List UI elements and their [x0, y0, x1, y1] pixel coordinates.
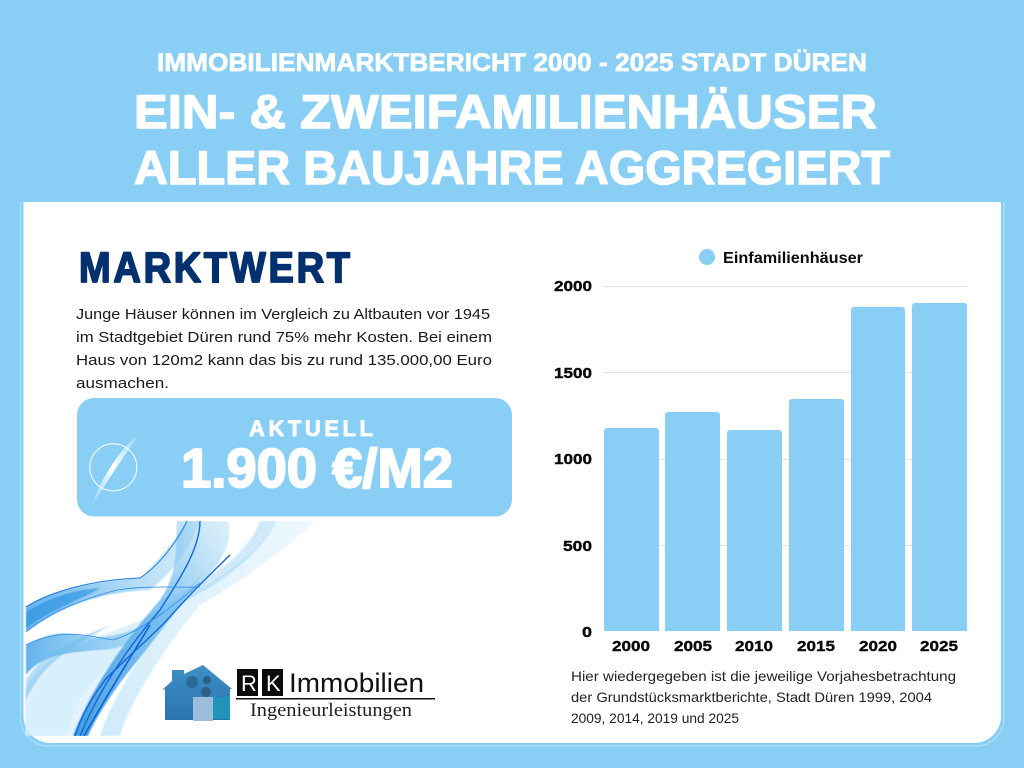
y axis labels	[554, 278, 592, 641]
logo mark: RK	[237, 669, 283, 696]
logo mark: RK: R	[241, 671, 257, 696]
y axis labels: 0	[582, 624, 592, 641]
body text: im Stadtgebiet Düren rund 75% mehr Kosten. Bei einem	[76, 329, 492, 346]
callout label: AKTUELL	[249, 416, 373, 441]
callout value: 1.900 €/M2	[181, 437, 453, 499]
title line: report name: IMMOBILIENMARKTBERICHT 2000 - 2025 STADT DÜREN	[157, 48, 867, 77]
logo	[162, 665, 435, 721]
icon: circle with slash	[90, 434, 139, 505]
y axis labels: 1000	[554, 451, 592, 468]
x axis labels: 2020	[859, 638, 897, 655]
chart source note: der Grundstücksmarktberichte, Stadt Düren 1999, 2004	[571, 689, 932, 705]
logo name: Immobilien	[289, 668, 424, 698]
bars	[604, 303, 967, 631]
x axis labels: 2000	[612, 638, 650, 655]
body text: ausmachen.	[76, 375, 169, 392]
x axis labels: 2005	[674, 638, 712, 655]
logo subtitle: Ingenieurleistungen	[250, 701, 412, 721]
chart legend: Einfamilienhäuser	[723, 250, 863, 267]
chart source note: 2009, 2014, 2019 und 2025	[571, 710, 739, 726]
x axis labels: 2015	[797, 638, 835, 655]
y axis labels: 500	[563, 538, 592, 555]
y axis labels: 2000	[554, 278, 592, 295]
body text: Haus von 120m2 kann das bis zu rund 135.000,00 Euro	[76, 352, 492, 369]
x axis labels: 2025	[920, 638, 958, 655]
callout: current price	[77, 398, 512, 516]
body text	[76, 306, 492, 392]
chart source note: Hier wiedergegeben ist die jeweilige Vorjahesbetrachtung	[571, 668, 956, 684]
body text: Junge Häuser können im Vergleich zu Altbauten vor 1945	[76, 306, 490, 323]
title	[134, 48, 890, 194]
chart source note	[571, 668, 956, 726]
white content panel	[20, 202, 1004, 746]
icon: puzzle house	[162, 665, 232, 721]
title line: Ein- und Zweifamilienhäuser: EIN- & ZWEIFAMILIENHÄUSER	[134, 85, 877, 138]
title line: aller Baujahre: ALLER BAUJAHRE AGGREGIERT	[134, 141, 890, 194]
x axis labels: 2010	[735, 638, 773, 655]
chart: Einfamilienhäuser	[554, 249, 967, 655]
heading: Marktwert: MARKTWERT	[79, 243, 350, 291]
x axis labels	[612, 638, 958, 655]
y axis labels: 1500	[554, 365, 592, 382]
logo mark: RK: K	[266, 671, 281, 696]
decorative wave graphic	[25, 521, 315, 736]
